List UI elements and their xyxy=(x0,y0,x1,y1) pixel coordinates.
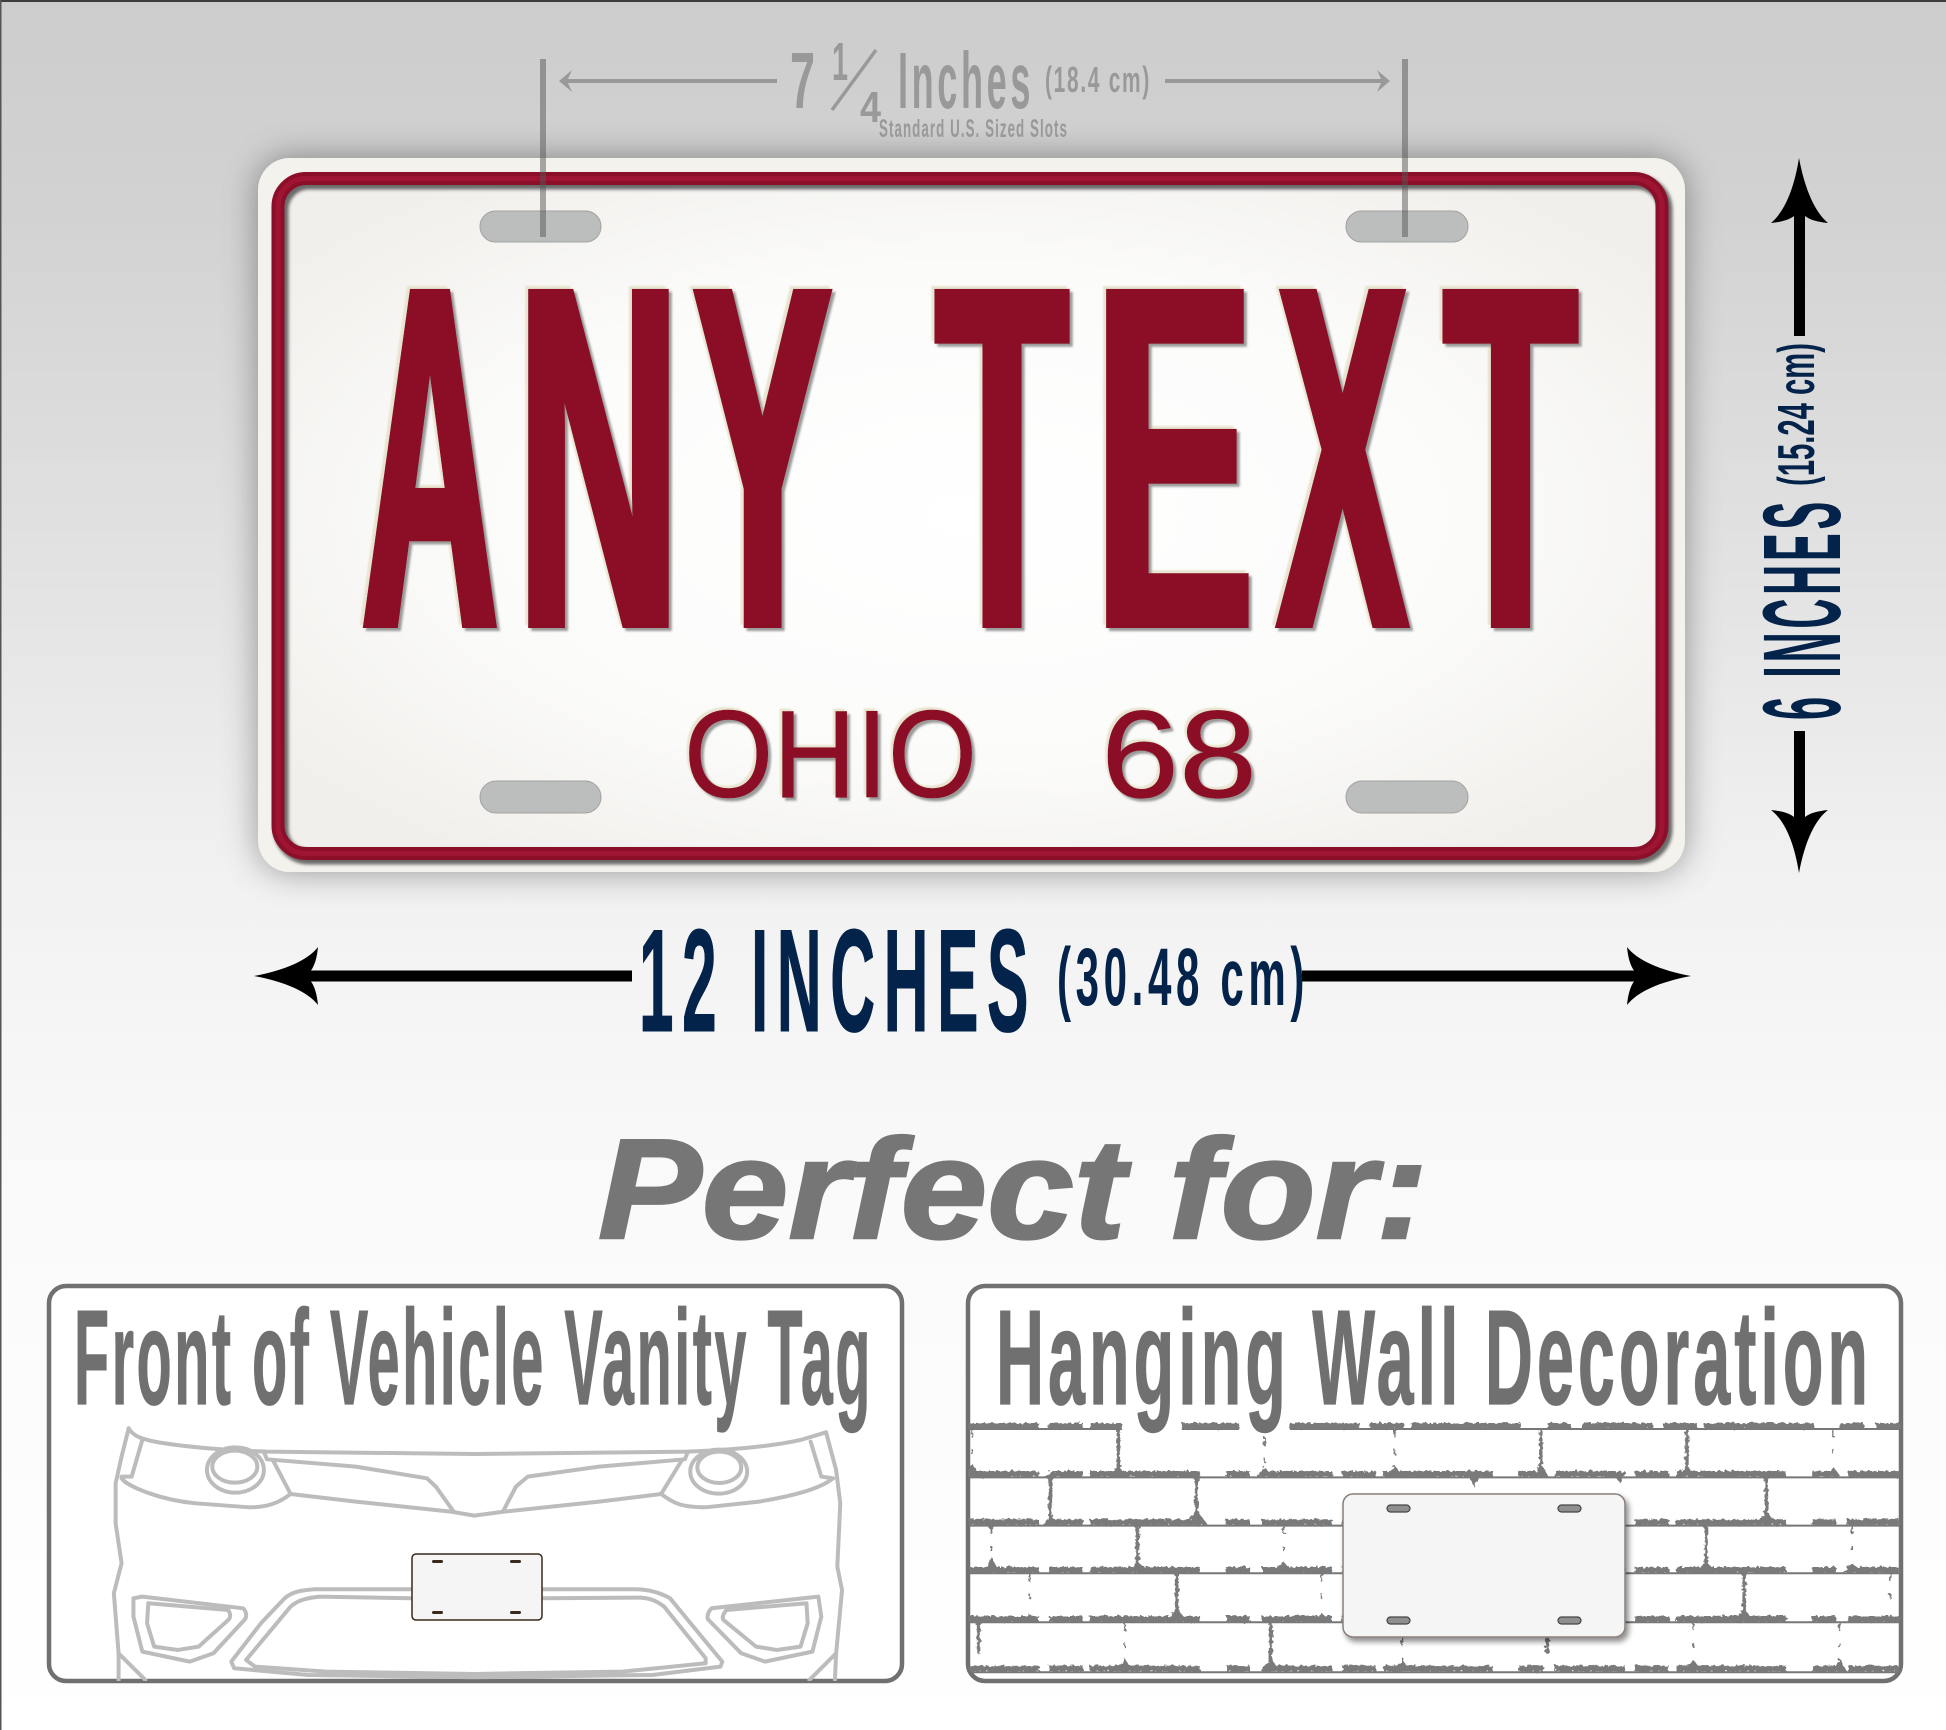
right dimension arrow xyxy=(1165,70,1390,92)
heading: Perfect for: Perfect for: xyxy=(598,1110,1428,1269)
right panel frame xyxy=(968,1286,1901,1681)
top right slot xyxy=(1346,211,1468,242)
slot spacing dimension xyxy=(540,32,1408,237)
bottom left slot xyxy=(480,781,601,813)
right arrow xyxy=(1302,947,1691,1005)
right guide line xyxy=(1402,59,1408,237)
top left slot xyxy=(480,211,601,242)
left panel frame xyxy=(49,1286,902,1681)
dimension label: 7 xyxy=(790,36,815,125)
infographic canvas: Front of Vehicle Vanity Tag xyxy=(74,1282,873,1433)
plate state and year: 68 xyxy=(1101,686,1257,824)
left dimension arrow xyxy=(559,70,777,92)
dimension label: Inches xyxy=(898,36,1034,125)
icon: brick wall xyxy=(965,1426,1900,1672)
dimension label xyxy=(790,32,1151,143)
small plate on car xyxy=(412,1554,542,1620)
dimension label: (18.4 cm) xyxy=(1045,59,1151,100)
left arrow xyxy=(254,947,632,1005)
plate main text: A xyxy=(362,183,498,733)
panel: front of vehicle xyxy=(49,1282,902,1681)
plate body xyxy=(258,158,1685,872)
icon: car front outline xyxy=(114,1428,842,1680)
plate face xyxy=(278,178,1662,853)
width dimension: 12 INCHES xyxy=(639,899,1037,1062)
width dimension xyxy=(254,899,1691,1062)
plate main text: T xyxy=(936,183,1068,733)
hanging plate xyxy=(1343,1494,1625,1637)
down arrow xyxy=(1771,731,1828,873)
dimension label: 4 xyxy=(860,83,881,132)
bottom right slot xyxy=(1346,781,1468,813)
plate main text: E xyxy=(1094,183,1254,733)
width metric label: (30.48 cm) xyxy=(1057,932,1309,1023)
height dimension: 6 INCHES xyxy=(1741,498,1864,720)
plate state and year xyxy=(684,686,1257,824)
dimension label: Standard U.S. Sized Slots xyxy=(879,115,1068,143)
plate border shadow xyxy=(281,182,1665,857)
plate main text: Y xyxy=(693,183,832,733)
panel: license plate xyxy=(258,158,1685,872)
red plate border xyxy=(278,178,1662,854)
left guide line xyxy=(540,59,546,237)
plate state and year: OHIO xyxy=(684,686,977,824)
panel: hanging wall decoration xyxy=(965,1282,1901,1681)
height metric label: (15.24 cm) xyxy=(1768,343,1826,486)
panel: license plate: T xyxy=(1444,183,1577,733)
up arrow xyxy=(1771,158,1828,336)
plate main text: N xyxy=(517,183,680,733)
plate main text: X xyxy=(1277,183,1409,733)
dimension label: 1 xyxy=(832,32,848,92)
